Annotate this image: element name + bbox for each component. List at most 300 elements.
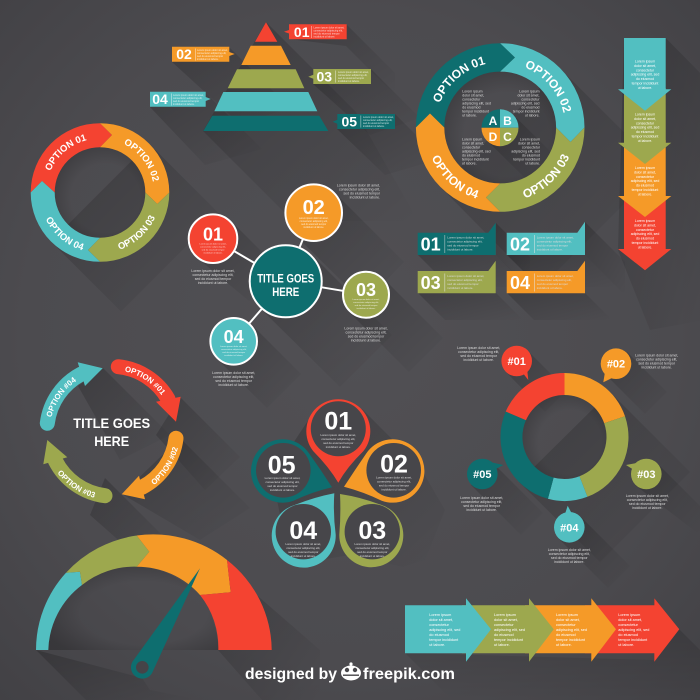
text block C: ut labore. (525, 162, 540, 166)
arrow option 02 (122, 438, 176, 499)
arrow text 3: do eiusmod (556, 633, 576, 637)
arrow olive (618, 88, 671, 164)
node 04: sed do eiusmod tempor (222, 351, 245, 354)
pyramid label 05: 05 (342, 114, 357, 130)
pyramid label 03: incididunt ut labore. (338, 80, 360, 83)
pyramid label 05: sed do eiusmod tempor (363, 122, 389, 125)
segment 02 (564, 373, 625, 423)
petal 02: consectetur adipiscing elit, (377, 480, 411, 484)
arrow red (585, 598, 679, 662)
caption 02: sed do eiusmod tempor (343, 192, 381, 196)
pyramid level 5 (203, 116, 328, 131)
arrow labels: OPTION #01 (125, 366, 165, 396)
node 01: sed do eiusmod tempor (202, 248, 225, 252)
caption 02: sed do eiusmod tempor (638, 362, 676, 366)
node 01: incididunt ut labore. (204, 252, 223, 254)
caption 05: Lorem ipsum dolor sit amet, (460, 496, 503, 500)
node 03: Lorem ipsum dolor sit amet, (352, 298, 380, 301)
arrow text 1: dolor sit amet, (634, 64, 656, 68)
caption 04: Lorem ipsum dolor sit amet, (548, 548, 591, 552)
segment option 02 (100, 123, 169, 204)
ribbon 01: sed do eiusmod tempor (447, 244, 479, 248)
option ring left (30, 123, 170, 262)
arrow text 2: do eiusmod (636, 130, 654, 134)
arrow text 3: Lorem ipsum (635, 166, 655, 170)
caption 02: incididunt ut labore. (642, 366, 672, 370)
ribbon 02: sed do eiusmod tempor (537, 244, 568, 248)
text block A: Lorem ipsum (462, 90, 483, 94)
petal 02: sed do eiusmod tempor (379, 484, 409, 488)
pyramid level 2 (241, 46, 291, 65)
arrow text 4: Lorem ipsum (635, 219, 655, 223)
petal 05: consectetur adipiscing elit, (266, 480, 300, 484)
ribbon 02: 02 (510, 234, 530, 254)
pyramid level 4 (214, 92, 317, 111)
ribbon labels (418, 222, 585, 293)
pyramid label 03: Lorem ipsum dolor sit amet, (338, 71, 369, 74)
caption 02: consectetur adipiscing elit, (339, 188, 380, 192)
centre pie ABCD: D (489, 130, 498, 144)
pyramid label 02: sed do eiusmod tempor (197, 55, 223, 58)
ribbon 01: Lorem ipsum dolor sit amet, (447, 236, 484, 240)
pyramid level 3 (228, 69, 304, 88)
donut chart (457, 346, 678, 564)
pyramid label 04: consectetur adipiscing elit, (173, 97, 203, 100)
centre pie ABCD: A (489, 114, 498, 128)
pyramid label 04 (150, 91, 211, 107)
arrow text 1: Lorem ipsum (429, 613, 451, 617)
arrow text 1: adipiscing elit, sed (429, 628, 460, 632)
arrow text 1: do eiusmod (636, 77, 654, 81)
option ring large (416, 43, 584, 212)
pyramid (150, 22, 395, 131)
arrow text 3: tempor incididunt (556, 638, 586, 642)
horizontal arrows (405, 598, 679, 662)
petal 01 (306, 399, 370, 483)
caption 01: sed do eiusmod tempor (195, 277, 232, 281)
petal 02: 02 (380, 451, 408, 479)
pyramid label 01: incididunt ut labore. (314, 36, 335, 38)
text block A: ut labore. (462, 114, 477, 118)
arrow text 2: tempor incididunt (494, 638, 524, 642)
gauge segment olive (66, 536, 149, 585)
bubble 03: #03 (637, 469, 655, 481)
arrow text 4: Lorem ipsum (618, 613, 640, 617)
ribbon 03: 03 (421, 273, 441, 293)
bubble 04 (554, 506, 585, 543)
caption 05: incididunt ut labore. (467, 508, 497, 512)
text block C: Lorem ipsum (520, 138, 540, 142)
arrow text 1: tempor incididunt (429, 638, 459, 642)
pyramid label 01: Lorem ipsum dolor sit amet, (314, 26, 345, 30)
pyramid label 05: incididunt ut labore. (363, 125, 385, 128)
node 01: Lorem ipsum dolor sit amet, (200, 242, 227, 246)
segment option 01 (416, 43, 515, 128)
ribbon 04: 04 (510, 273, 530, 293)
text block C: consectetur (522, 146, 541, 150)
arrow labels: OPTION #03 (58, 470, 96, 498)
node 04: consectetur adipiscing elit, (221, 348, 247, 351)
credit line: freepik.com (363, 666, 455, 683)
pyramid label 02 (172, 46, 235, 62)
text block B: dolor sit amet, (518, 94, 540, 98)
ribbon 04: Lorem ipsum dolor sit amet, (537, 274, 574, 278)
node 02: 02 (303, 197, 325, 219)
node 03: sed do eiusmod tempor (355, 304, 378, 307)
ribbon 03: sed do eiusmod tempor (447, 282, 479, 286)
arrow text 1: consectetur (636, 68, 655, 72)
ribbon 03: Lorem ipsum dolor sit amet, (447, 274, 484, 278)
pyramid label 05: Lorem ipsum dolor sit amet, (363, 116, 394, 119)
arrow cycle title: TITLE GOES (73, 415, 150, 431)
ribbon 04: consectetur adipiscing elit, (537, 278, 572, 282)
segment 05 (500, 412, 554, 499)
bubble 03 (626, 459, 662, 489)
arrow text 4: ut labore. (618, 643, 634, 647)
petal 01: 01 (324, 407, 352, 435)
petal 01: incididunt ut labore. (326, 445, 351, 449)
caption 03: incididunt ut labore. (632, 506, 663, 510)
circular arrows (40, 359, 184, 504)
arrow text 4: tempor incididunt (632, 241, 658, 245)
caption 02: consectetur adipiscing elit, (636, 358, 677, 362)
caption 03: sed do eiusmod tempor (348, 334, 385, 338)
pyramid level 1 (255, 22, 277, 42)
ring labels: OPTION 02 (526, 61, 571, 113)
connectors (213, 213, 366, 341)
arrow text 3: consectetur (636, 175, 655, 179)
text block A: consectetur (462, 98, 481, 102)
text block A: adipiscing elit, sed (462, 102, 491, 106)
node 02: Lorem ipsum dolor sit amet, (299, 217, 329, 220)
caption 01: incididunt ut labore. (198, 281, 228, 285)
segment 03 (580, 416, 628, 497)
bubble 02 (601, 348, 631, 382)
arrow text 3: dolor sit amet, (556, 618, 580, 622)
caption 03: consectetur adipiscing elit, (345, 330, 387, 334)
text block C: do eiusmod (522, 154, 540, 158)
ring labels: OPTION 04 (432, 156, 478, 198)
arrow text 1: ut labore. (638, 86, 652, 90)
ribbon 03 (418, 261, 496, 293)
text block B: adipiscing elit, sed (511, 102, 540, 106)
arrow red (618, 190, 671, 270)
arrow text 2: adipiscing elit, sed (494, 628, 525, 632)
ring labels: OPTION 02 (124, 139, 159, 182)
pyramid label 05 (333, 114, 395, 130)
pyramid label 02: 02 (176, 46, 192, 62)
ring labels: OPTION 03 (118, 215, 154, 249)
teardrop flower (251, 399, 424, 568)
text block C: adipiscing elit, sed (511, 150, 540, 154)
text block D: tempor incididunt (462, 158, 489, 162)
arrow text 3: dolor sit amet, (634, 170, 656, 174)
petal 03: consectetur adipiscing elit, (355, 546, 389, 550)
ribbon 04: incididunt ut labore. (537, 286, 563, 290)
caption 02: Lorem ipsum dolor sit amet, (337, 184, 380, 188)
node 03 (343, 272, 389, 318)
caption 04: incididunt ut labore. (219, 383, 249, 387)
arrow text 4: do eiusmod (636, 237, 654, 241)
petal 05: sed do eiusmod tempor (267, 484, 298, 488)
petal 04: sed do eiusmod tempor (288, 550, 318, 554)
arrow orange (618, 140, 671, 217)
gauge (36, 534, 272, 679)
credit line: designed by (245, 666, 337, 683)
arrow text 3: tempor incididunt (632, 188, 658, 192)
arrow text 1: Lorem ipsum (635, 60, 655, 64)
pyramid label 01 (284, 24, 347, 40)
caption 02: incididunt ut labore. (350, 196, 380, 200)
arrow text 3: ut labore. (638, 192, 652, 196)
arrow orange (525, 598, 616, 662)
arrow text 3: ut labore. (556, 643, 572, 647)
node 04: Lorem ipsum dolor sit amet, (220, 345, 248, 348)
text block D: do eiusmod (462, 154, 480, 158)
node 04 (210, 318, 257, 365)
caption 01: Lorem ipsum dolor sit amet, (191, 269, 235, 273)
arrow text 2: tempor incididunt (632, 134, 658, 138)
node 01: 01 (203, 224, 223, 244)
caption 03: Lorem ipsum dolor sit amet, (626, 494, 669, 498)
arrow text 2: adipiscing elit, sed (631, 126, 659, 130)
pyramid label 03: sed do eiusmod tempor (338, 77, 364, 80)
network diagram (189, 184, 389, 387)
text block D: Lorem ipsum (462, 138, 482, 142)
arrow text 4: dolor sit amet, (634, 223, 656, 227)
ribbon 01: consectetur adipiscing elit, (447, 240, 483, 244)
text block B: Lorem ipsum (519, 90, 540, 94)
arrow text 1: tempor incididunt (632, 82, 658, 86)
caption 03: incididunt ut labore. (351, 338, 381, 342)
centre pie ABCD (482, 109, 518, 146)
node 03: incididunt ut labore. (357, 307, 376, 310)
central node (250, 245, 322, 317)
arrow text 3: Lorem ipsum (556, 613, 578, 617)
ribbon 01: incididunt ut labore. (447, 248, 473, 252)
ring labels (46, 134, 159, 250)
arrow cycle title (73, 415, 150, 449)
text block B: tempor incididunt (513, 110, 540, 114)
arrow light teal (405, 598, 491, 662)
caption 01: incididunt ut labore. (464, 358, 494, 362)
node 02: incididunt ut labore. (303, 226, 324, 229)
arrow text 3: consectetur (556, 623, 576, 627)
node 02: consectetur adipiscing elit, (300, 220, 328, 223)
arrow labels: OPTION #04 (46, 377, 76, 417)
bubble 05: #05 (473, 469, 491, 481)
caption 01: consectetur adipiscing elit, (458, 350, 499, 354)
petal 04 (272, 493, 336, 568)
petal 04: Lorem ipsum dolor sit amet, (285, 542, 321, 546)
arrow text 2: ut labore. (638, 139, 652, 143)
ring labels: OPTION 04 (46, 217, 84, 250)
segment option 01 (31, 123, 112, 192)
arrow text 4: adipiscing elit, sed (618, 628, 649, 632)
arrow text 4: consectetur (636, 228, 655, 232)
petal 04: consectetur adipiscing elit, (286, 546, 320, 550)
text block A: tempor incididunt (462, 110, 489, 114)
ring labels (432, 56, 571, 198)
arrow cycle title: HERE (94, 433, 129, 449)
bubble 01 (501, 346, 532, 380)
arrow text 4: dolor sit amet, (618, 618, 642, 622)
arrow text 1: dolor sit amet, (429, 618, 453, 622)
petal 03: Lorem ipsum dolor sit amet, (354, 542, 390, 546)
text block C: dolor sit amet, (518, 142, 540, 146)
caption 04: sed do eiusmod tempor (215, 379, 253, 383)
caption 01: Lorem ipsum dolor sit amet, (457, 346, 500, 350)
pyramid label 02: incididunt ut labore. (197, 58, 219, 61)
donut hole (522, 394, 607, 480)
arrow text 4: ut labore. (638, 245, 652, 249)
ribbon 02 (507, 222, 585, 255)
caption 04: consectetur adipiscing elit, (549, 552, 590, 556)
node 02 (285, 184, 342, 241)
petal 04: incididunt ut labore. (291, 554, 316, 558)
pyramid label 03 (308, 69, 371, 85)
arrow option 01 (118, 367, 181, 422)
icon: freepik mascot (341, 662, 361, 680)
caption 01: consectetur adipiscing elit, (192, 273, 234, 277)
text block B: do eiusmod (521, 106, 540, 110)
segment option 03 (88, 192, 169, 262)
arrow text 3: adipiscing elit, sed (556, 628, 587, 632)
pyramid label 04: Lorem ipsum dolor sit amet, (173, 94, 204, 97)
caption 04: Lorem ipsum dolor sit amet, (212, 371, 255, 375)
petal 02 (344, 439, 424, 503)
node 02: sed do eiusmod tempor (301, 223, 326, 226)
ribbon 01 (418, 223, 496, 255)
petal 03: 03 (358, 517, 386, 545)
node 03: 03 (356, 280, 376, 300)
gauge needle (131, 568, 200, 679)
gauge segment orange (137, 534, 231, 595)
pyramid label 03: consectetur adipiscing elit, (338, 74, 368, 77)
ribbon 02: incididunt ut labore. (537, 248, 563, 252)
vertical arrows (618, 38, 671, 270)
ribbon 02: consectetur adipiscing elit, (537, 240, 572, 244)
arrow text 1: do eiusmod (429, 633, 449, 637)
central node: TITLE GOES (257, 272, 314, 286)
ring labels: OPTION 01 (46, 134, 86, 170)
centre shadow (487, 114, 553, 180)
text block D: dolor sit amet, (462, 142, 484, 146)
petal 01: Lorem ipsum dolor sit amet, (320, 433, 356, 437)
arrow text 2: consectetur (494, 623, 514, 627)
caption 05: sed do eiusmod tempor (463, 504, 501, 508)
pyramid label 04: sed do eiusmod tempor (173, 100, 199, 103)
segment option 02 (500, 43, 584, 142)
segment option 04 (31, 181, 100, 262)
ribbon 03: consectetur adipiscing elit, (447, 278, 483, 282)
caption 02: Lorem ipsum dolor sit amet, (635, 354, 678, 358)
node 01: consectetur adipiscing elit, (200, 246, 226, 248)
caption 03: sed do eiusmod tempor (629, 502, 666, 506)
pyramid label 02: Lorem ipsum dolor sit amet, (197, 49, 228, 52)
text block A: do eiusmod (462, 106, 480, 110)
ring hole (54, 146, 146, 238)
pyramid label 05: consectetur adipiscing elit, (363, 119, 393, 122)
arrow option 03 (43, 440, 105, 496)
text block D: consectetur (462, 146, 481, 150)
gauge segment red (200, 560, 272, 650)
pyramid label 02: consectetur adipiscing elit, (197, 52, 227, 55)
bubble 02: #02 (607, 359, 625, 371)
petal 04: 04 (289, 517, 317, 545)
gauge segment light teal (36, 572, 82, 650)
bubble 05 (467, 459, 503, 489)
pyramid label 03: 03 (317, 69, 332, 85)
caption 01: sed do eiusmod tempor (460, 354, 498, 358)
node 01 (189, 214, 237, 263)
caption 05: consectetur adipiscing elit, (461, 500, 502, 504)
petal 01: sed do eiusmod tempor (323, 441, 353, 445)
pyramid label 01: sed do eiusmod tempor (314, 32, 340, 36)
arrow text 3: do eiusmod (636, 184, 654, 188)
arrow labels: OPTION #02 (152, 447, 178, 484)
caption 04: consectetur adipiscing elit, (213, 375, 254, 379)
arrow text 1: consectetur (429, 623, 450, 627)
petal 03 (339, 494, 403, 567)
arrow text 2: do eiusmod (494, 633, 514, 637)
pyramid label 04: incididunt ut labore. (173, 103, 195, 106)
arrow text 3: adipiscing elit, sed (631, 179, 659, 183)
node 03: consectetur adipiscing elit, (353, 301, 379, 304)
pyramid label 04: 04 (152, 91, 168, 107)
ribbon 04 (507, 261, 585, 293)
petal 05: Lorem ipsum dolor sit amet, (265, 476, 301, 480)
arrow text 1: adipiscing elit, sed (631, 73, 659, 77)
arrow text 2: Lorem ipsum (494, 613, 516, 617)
arrow olive (462, 598, 554, 662)
bubble 04: #04 (560, 522, 579, 534)
pyramid label 01: consectetur adipiscing elit, (314, 30, 343, 32)
arrow labels (46, 366, 178, 498)
arrow text 2: Lorem ipsum (635, 112, 655, 116)
caption 03: Lorem ipsum dolor sit amet, (344, 326, 388, 330)
ribbon 02: Lorem ipsum dolor sit amet, (537, 236, 574, 240)
text block A: dolor sit amet, (462, 94, 484, 98)
petal 03: sed do eiusmod tempor (357, 550, 387, 554)
pyramid label 01: 01 (294, 24, 310, 40)
petal 03: incididunt ut labore. (360, 554, 385, 558)
petal 02: incididunt ut labore. (381, 488, 407, 492)
central node: HERE (272, 285, 299, 299)
centre pie ABCD: C (503, 130, 512, 144)
arrow text 4: adipiscing elit, sed (631, 232, 659, 236)
text block B: consectetur (521, 98, 540, 102)
arrow text 4: consectetur (618, 623, 639, 627)
credit line (245, 662, 455, 683)
text block C: tempor incididunt (513, 158, 540, 162)
text block D: ut labore. (462, 162, 477, 166)
arrow text 2: dolor sit amet, (634, 117, 656, 121)
petal 02: Lorem ipsum dolor sit amet, (376, 476, 412, 480)
caption 04: sed do eiusmod tempor (551, 556, 588, 560)
segment 01 (506, 373, 564, 420)
ribbon 03: incididunt ut labore. (447, 286, 473, 290)
node 04: 04 (224, 327, 244, 347)
arrow light teal (618, 38, 671, 111)
node 04: incididunt ut labore. (224, 354, 244, 357)
segment option 04 (416, 114, 500, 212)
ribbon 01: 01 (421, 234, 441, 254)
segment option 03 (486, 128, 584, 212)
bubble 01: #01 (508, 356, 526, 368)
text block D: adipiscing elit, sed (462, 150, 491, 154)
arrow option 04 (47, 362, 103, 423)
